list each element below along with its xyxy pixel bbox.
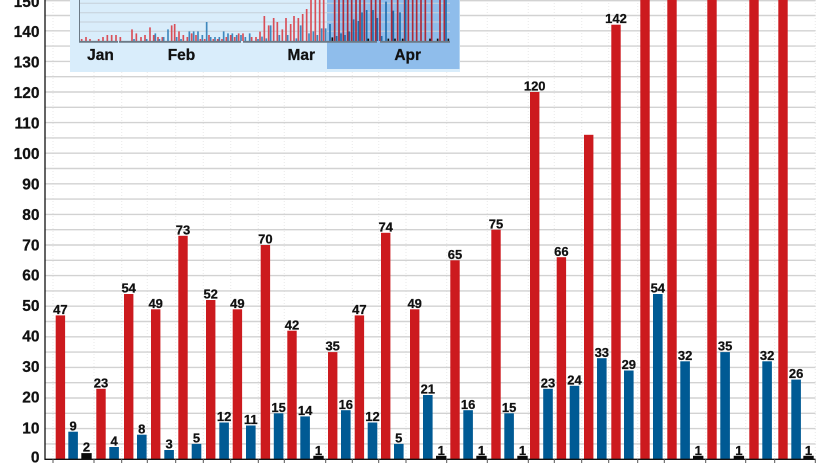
y axis labels: 20: [22, 390, 40, 407]
blue bar series with values: 24: [567, 372, 582, 387]
blue bar series with values: 26: [789, 366, 803, 381]
red bar series with values: 142: [605, 11, 627, 26]
inset panel: January to April overview: [70, 0, 460, 72]
blue bar series with values: 23: [541, 375, 555, 390]
y axis labels: 120: [14, 85, 40, 102]
red bar series with values: 75: [489, 216, 503, 231]
blue bar series with values: 5: [395, 430, 402, 446]
blue bar series with values: 15: [502, 400, 516, 415]
red bar series with values: 74: [378, 219, 394, 234]
blue bar series with values: 14: [298, 403, 313, 418]
red bar series with values: 49: [148, 296, 163, 311]
inset axis: [79, 0, 450, 42]
red bar series with values: 47: [53, 302, 68, 317]
black bar series with values: 1: [805, 443, 812, 458]
blue bar series with values: 9: [69, 418, 77, 433]
blue bar series with values: 16: [461, 397, 475, 412]
blue bar series with values: 15: [271, 400, 286, 415]
inset month labels: Feb: [168, 47, 195, 64]
y axis labels: 80: [22, 207, 40, 224]
red bar series with values: 120: [524, 79, 546, 94]
black bar series with values: [81, 440, 814, 459]
black bar series with values: 1: [695, 443, 702, 458]
y axis labels: 70: [22, 237, 40, 254]
red bar series with values: 42: [285, 317, 299, 332]
red bar series with values: 52: [203, 287, 218, 302]
black bar series with values: 1: [315, 443, 322, 458]
black bar series with values: 1: [735, 443, 743, 458]
red bar series with values: 49: [230, 296, 245, 311]
blue bar series with values: 32: [760, 348, 774, 363]
blue bar series with values: 8: [138, 421, 145, 436]
y axis labels: [14, 0, 40, 466]
blue bar series with values: 12: [365, 409, 380, 424]
y axis labels: 130: [14, 55, 40, 72]
red bar series with values: 65: [448, 247, 462, 262]
black bar series with values: 2: [83, 440, 90, 455]
red bar series with values: 54: [121, 281, 137, 296]
y axis labels: 50: [22, 298, 40, 315]
red bar series with values: 70: [258, 232, 273, 247]
blue bar series with values: 5: [193, 430, 200, 446]
inset bars: January to late March: [82, 22, 258, 41]
y axis labels: 40: [22, 328, 40, 346]
inset month labels: [87, 47, 421, 64]
red bar series with values: 49: [407, 296, 422, 311]
black bar series with values: 1: [519, 443, 526, 458]
red bar series with values: 23: [94, 375, 108, 390]
y axis labels: 100: [14, 146, 40, 163]
blue bar series with values: 4: [110, 434, 118, 449]
y axis labels: 140: [14, 24, 40, 41]
black bar series with values: 1: [478, 443, 485, 458]
blue bar series with values: 33: [595, 345, 609, 360]
blue bar series with values: 16: [339, 397, 353, 412]
red bar series with values: 47: [352, 302, 367, 317]
inset month labels: Mar: [288, 47, 315, 64]
red bar series with values: 35: [325, 339, 340, 354]
blue bar series with values: 21: [421, 382, 435, 397]
inset bars: late March and April: [260, 0, 448, 41]
blue bar series with values: 29: [622, 357, 636, 372]
y axis labels: 90: [22, 176, 40, 194]
y axis labels: 60: [22, 268, 40, 285]
y axis labels: 10: [22, 420, 40, 437]
blue bar series with values: 32: [678, 348, 692, 363]
blue bar series with values: 3: [165, 437, 173, 452]
y axis labels: 30: [22, 359, 40, 376]
blue bar series with values: 35: [718, 339, 732, 354]
red bar series with values: 73: [176, 222, 190, 237]
inset month labels: Jan: [87, 47, 114, 64]
black bar series with values: 1: [438, 443, 445, 458]
y axis labels: 0: [31, 450, 40, 466]
inset month labels: Apr: [394, 47, 421, 64]
blue bar series with values: 11: [244, 412, 258, 427]
red bar series with values: 66: [554, 244, 569, 259]
blue bar series with values: 12: [217, 409, 231, 424]
blue bar series with values: 54: [651, 281, 666, 296]
y axis labels: 110: [14, 116, 40, 132]
blue bar series with values: [68, 281, 803, 459]
